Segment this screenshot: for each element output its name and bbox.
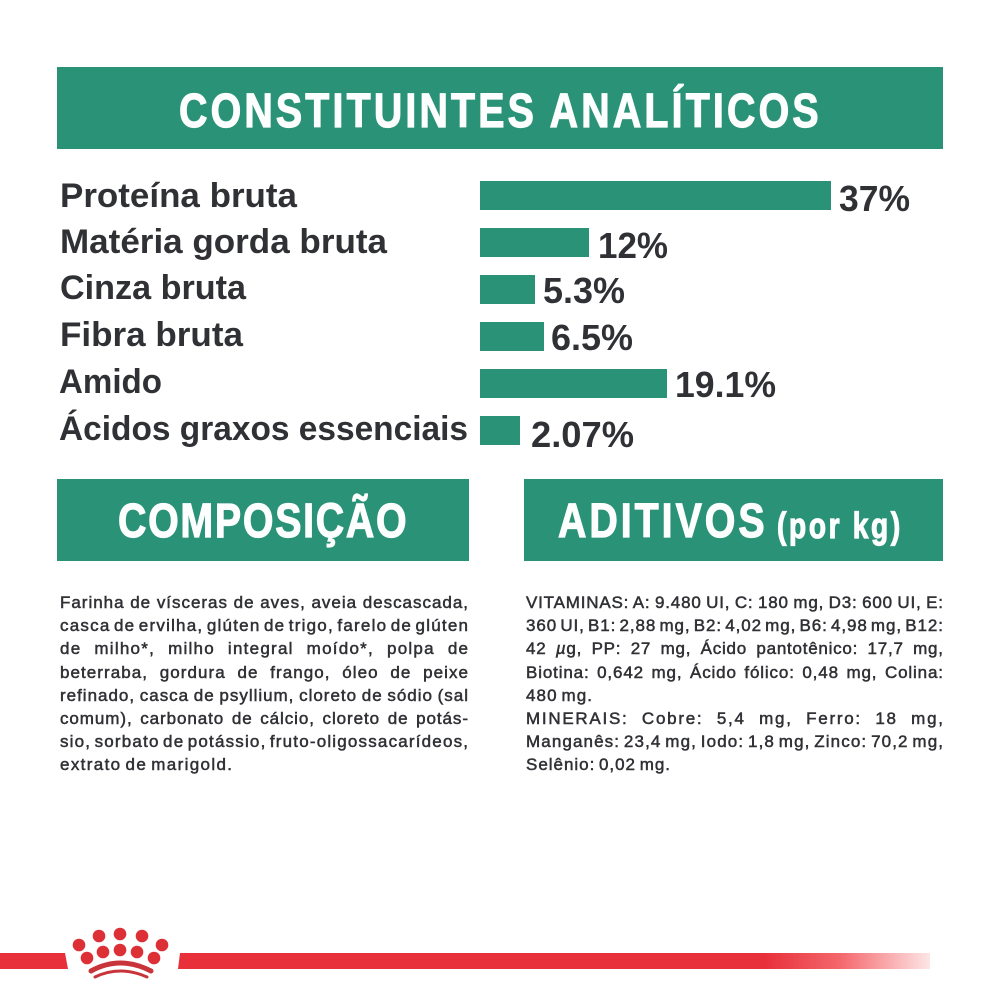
row: cinza bruta: 5.3% [543,270,625,311]
header: aditivos por kg: ADITIVOS [558,494,765,548]
row: ácidos graxos essenciais: Ácidos graxos essenciais [59,408,468,448]
row: matéria gorda bruta [60,223,668,266]
row: proteína bruta [60,177,910,219]
bar chart: analytical constituents [59,177,910,455]
icon: royal canin crown logo [73,928,168,977]
text block: composição: sio, sorbato de potássio, fruto-oligossacarídeos, [60,732,468,751]
row: matéria gorda bruta: Matéria gorda bruta [60,223,388,261]
row: ácidos graxos essenciais: 2.07% [531,414,634,455]
row: proteína bruta: Proteína bruta [60,177,298,215]
row: fibra bruta [60,316,633,358]
text block: aditivos [526,593,943,774]
header: constituintes analíticos: CONSTITUINTES ANALÍTICOS [179,83,819,138]
row: proteína bruta: 37% [839,178,910,219]
row: cinza bruta: Cinza bruta [60,269,247,307]
header: aditivos por kg [524,479,943,561]
text block: aditivos: 360 UI, B1: 2,88 mg, B2: 4,02 mg, B6: 4,98 mg, B12: [526,616,943,635]
text block: aditivos: 480 mg. [526,686,592,705]
text block: composição: comum), carbonato de cálcio, cloreto de potás- [60,709,468,728]
text block: composição: beterraba, gordura de frango, óleo de peixe [60,663,468,682]
row: amido: Amido [59,363,162,401]
row: ácidos graxos essenciais [59,408,634,455]
text block: composição: de milho*, milho integral moído*, polpa de [60,639,468,658]
text block: aditivos: 42 µg, PP: 27 mg, Ácido pantotênico: 17,7 mg, [526,639,943,658]
header: aditivos por kg: (por kg) [777,506,900,546]
text block: aditivos: MINERAIS: Cobre: 5,4 mg, Ferro: 18 mg, [526,709,943,728]
row: matéria gorda bruta: 12% [598,225,668,266]
row: cinza bruta [60,269,625,311]
header: constituintes analíticos [57,67,943,149]
header: composição: COMPOSIÇÃO [118,493,407,548]
text block: aditivos: Manganês: 23,4 mg, Iodo: 1,8 mg, Zinco: 70,2 mg, [526,732,943,751]
row: amido [59,363,776,405]
text block: composição: extrato de marigold. [60,755,232,774]
text block: aditivos: Biotina: 0,642 mg, Ácido fólico: 0,48 mg, Colina: [526,663,943,682]
text block: composição [60,593,468,774]
row: fibra bruta: Fibra bruta [60,316,244,354]
text block: aditivos: Selênio: 0,02 mg. [526,755,670,774]
text block: aditivos: VITAMINAS: A: 9.480 UI, C: 180 mg, D3: 600 UI, E: [526,593,943,612]
text block: composição: refinado, casca de psyllium, cloreto de sódio (sal [60,686,468,705]
row: amido: 19.1% [675,364,776,405]
header: composição [57,479,469,561]
row: fibra bruta: 6.5% [551,317,633,358]
text block: composição: Farinha de vísceras de aves, aveia descascada, [60,593,468,612]
footer red stripe [0,953,930,969]
text block: composição: casca de ervilha, glúten de trigo, farelo de glúten [60,616,468,635]
